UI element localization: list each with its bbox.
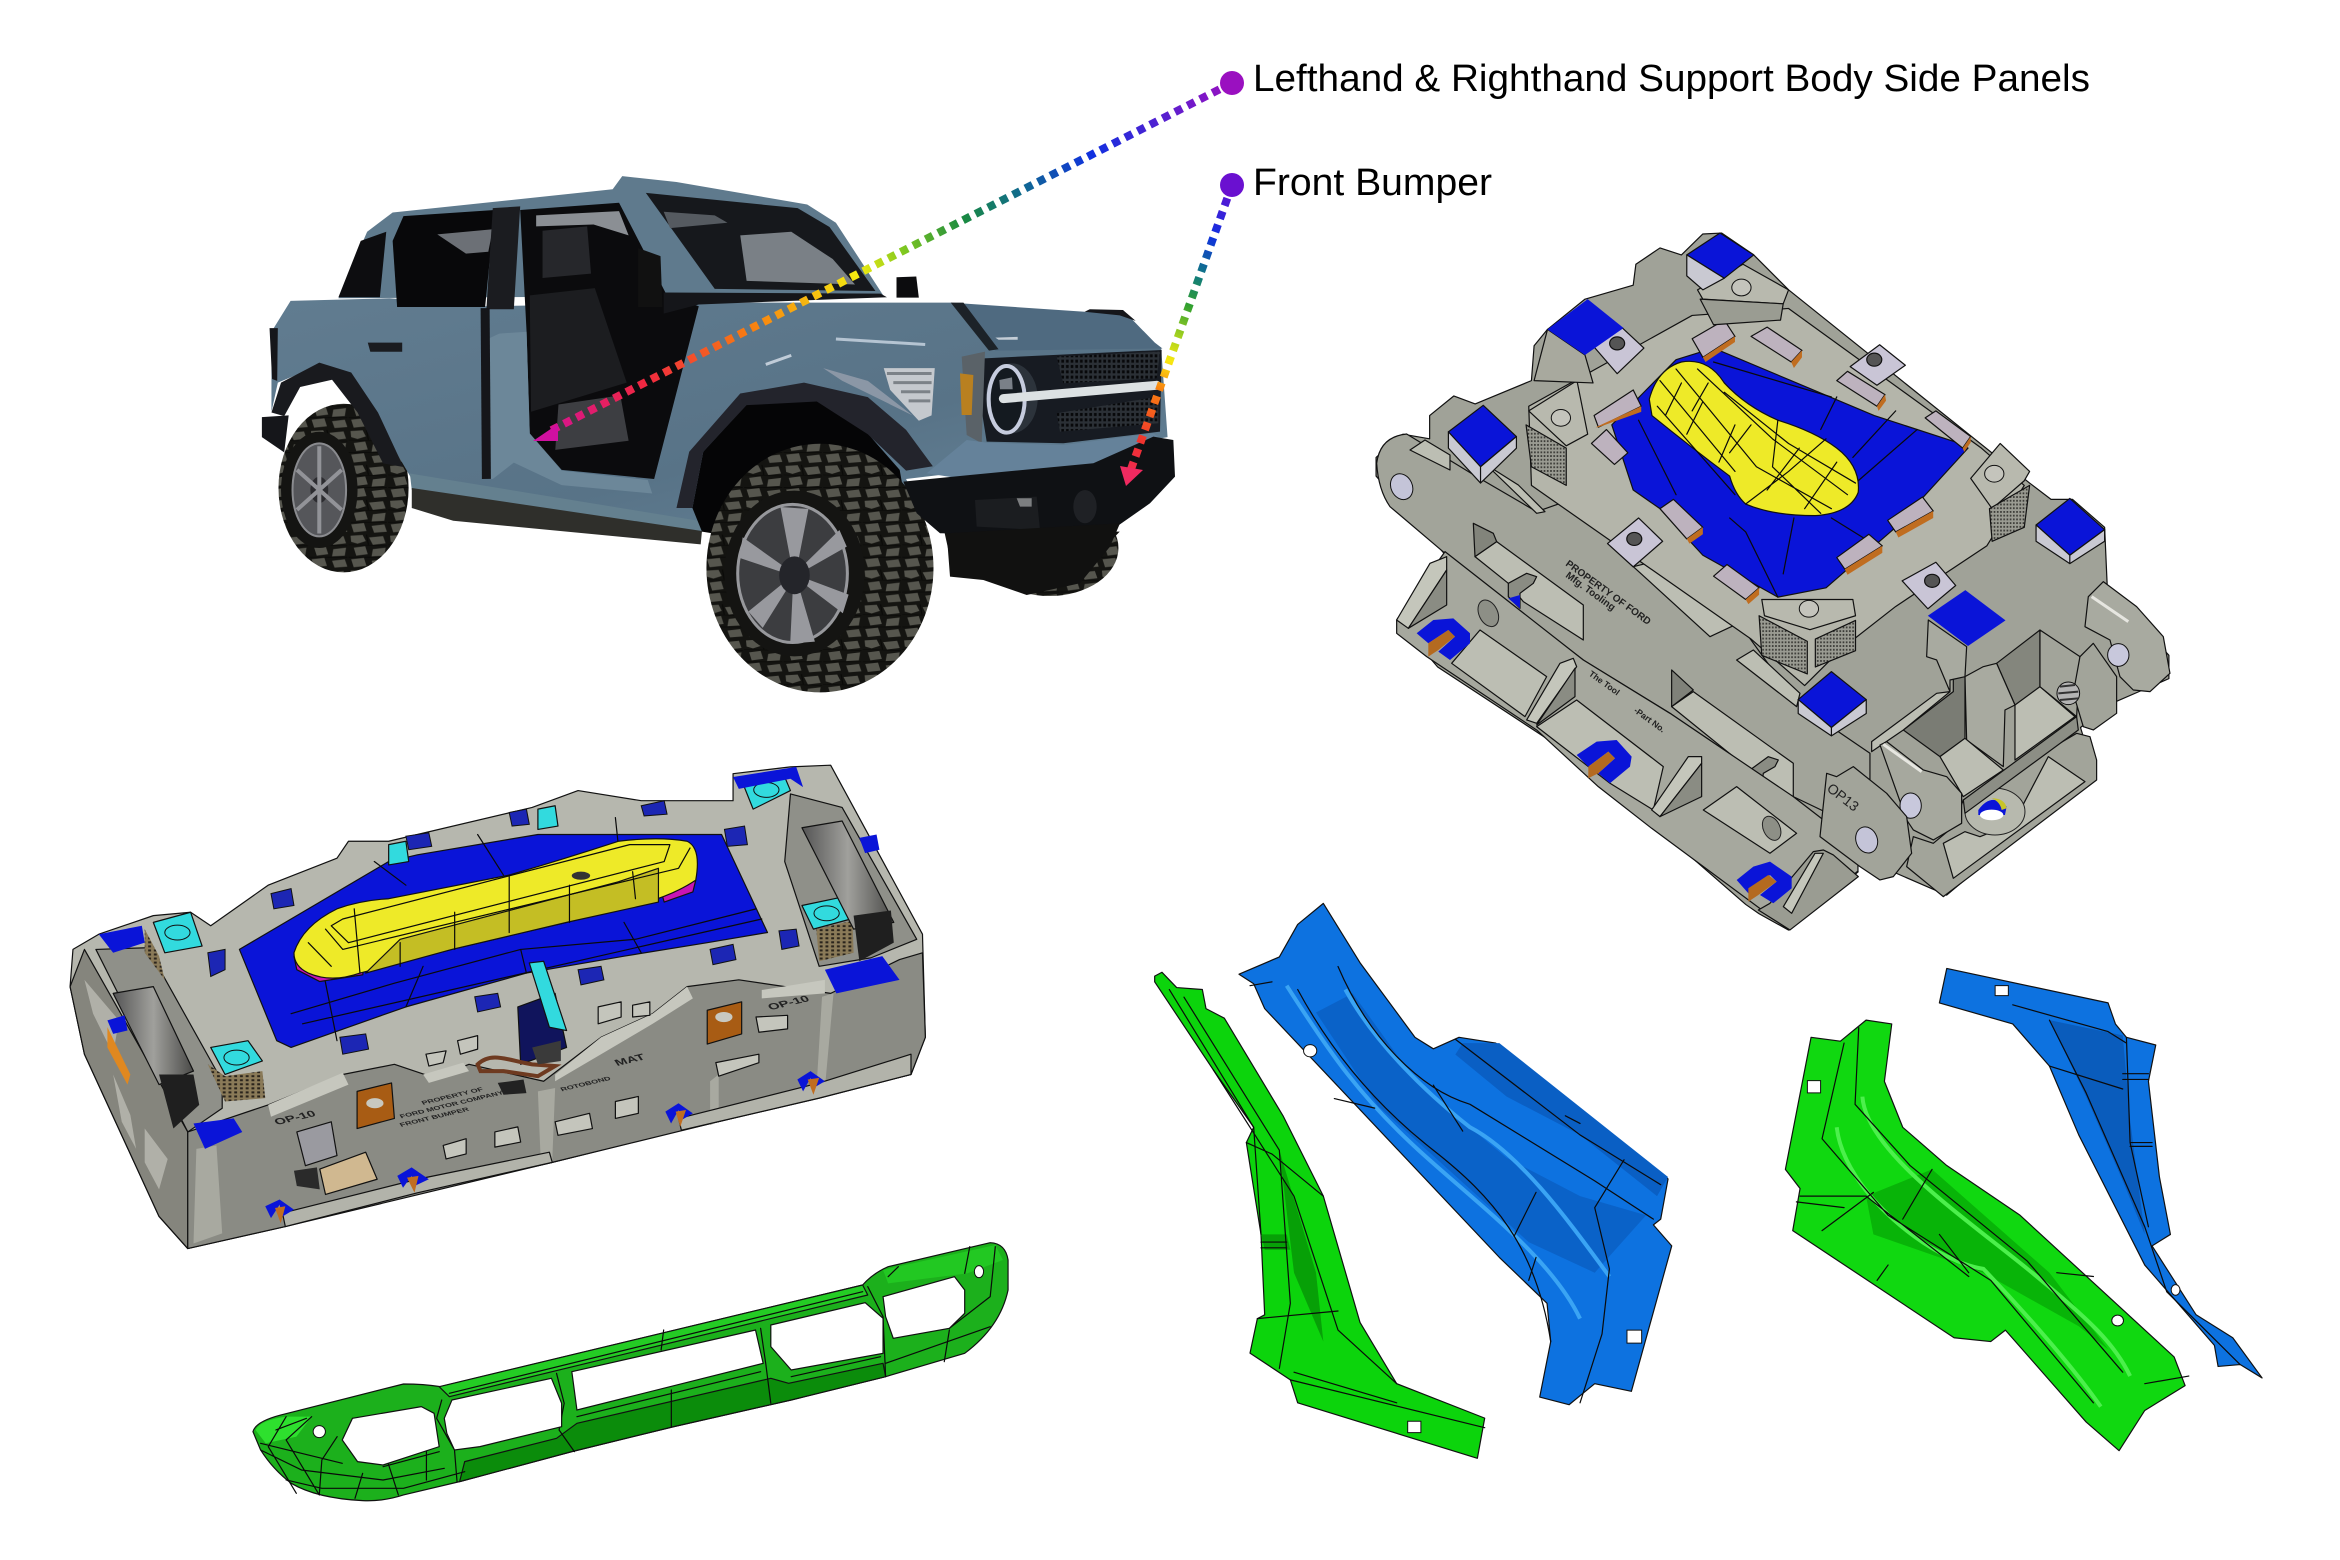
- central bar strip: [1963, 717, 2078, 813]
- engraved text: ROTOBOND: [559, 1075, 613, 1093]
- rear wheel: [278, 404, 409, 572]
- left end highlight: [256, 1417, 312, 1443]
- car body: [271, 298, 1168, 532]
- valve and switch box: [294, 1122, 377, 1194]
- cyan locating blocks: [153, 770, 851, 1074]
- left recess: [96, 948, 222, 1132]
- grille upper: [1057, 352, 1160, 383]
- blue corner cubes: [1448, 233, 2105, 736]
- edge slots: [265, 1071, 825, 1223]
- headlight surround: [962, 352, 985, 443]
- surface mesh lines: [261, 1247, 995, 1498]
- engraved text: The Tool: [1587, 669, 1622, 697]
- rocker sill: [410, 474, 702, 532]
- orange name plates: [107, 1002, 742, 1129]
- base ribs: [1397, 557, 1702, 817]
- panel shape: [1239, 903, 1672, 1405]
- rear tail light and bumper: [262, 328, 289, 452]
- die model: front bumper tool: [70, 765, 925, 1249]
- block circles: [165, 782, 839, 1065]
- yellow punch: [1649, 361, 1858, 516]
- left end face: [70, 949, 188, 1249]
- U slot three: [1737, 862, 1792, 903]
- rear door cut line: [485, 308, 486, 479]
- part: front bumper: [253, 1243, 1008, 1501]
- U slot one: [1417, 618, 1470, 660]
- engraved text: OP-10: [765, 993, 812, 1012]
- shaded upper band: [1455, 1043, 1668, 1196]
- clamp bolts: [1551, 279, 2004, 617]
- rear wheel arch: [271, 363, 403, 467]
- base floors: [1452, 630, 1797, 853]
- panel shape: [1155, 972, 1485, 1458]
- amber marker: [960, 373, 973, 415]
- callout leader: body side panels: [533, 83, 1232, 441]
- panel lines: [1796, 1028, 2189, 1403]
- floor: [1940, 738, 2003, 797]
- light strip: [1872, 692, 1950, 752]
- U slot two: [1577, 740, 1632, 783]
- base body: [1397, 552, 1858, 930]
- small blue stop blocks: [208, 801, 799, 1054]
- bumper outer shape: [253, 1243, 1008, 1501]
- part: green lefthand panel, side view: [1155, 972, 1485, 1458]
- front fascia: [980, 350, 1162, 443]
- small hole in bar: [1759, 813, 1785, 843]
- blue form pad: [239, 818, 768, 1047]
- lower darker face: [460, 1363, 886, 1482]
- right lug upper: [2057, 582, 2170, 730]
- die model: body side panel tool: [1376, 233, 2170, 930]
- dash cowl: [664, 292, 887, 314]
- callout leader: front bumper: [1120, 185, 1232, 486]
- bumper openings: [342, 1277, 965, 1465]
- gas cylinders: [113, 821, 894, 1129]
- far front wheel: [944, 500, 1120, 596]
- part: blue lefthand panel: [1239, 903, 1672, 1405]
- dark fold: [2049, 1020, 2145, 1234]
- lower right frame: [1907, 733, 2097, 897]
- engraved text: PROPERTY OF FORD: [1563, 559, 1653, 628]
- top plate: [1529, 308, 2024, 686]
- light strips: [1410, 440, 1800, 707]
- ridge highlights: [1287, 986, 1609, 1319]
- window two: [1672, 692, 1793, 800]
- block under blue cube: [1927, 620, 1967, 692]
- car photo: Ford Bronco: [262, 176, 1175, 692]
- right recess: [785, 794, 917, 966]
- robot switch assembly: [478, 961, 567, 1095]
- stop blocks with bolts: [1593, 328, 1956, 609]
- recess two: [1672, 670, 1693, 707]
- arrowhead: body side panels: [533, 424, 558, 441]
- recess: [1903, 677, 1965, 757]
- die silhouette: [1376, 233, 2169, 930]
- left front base and bar: [1377, 434, 1870, 930]
- side step: [412, 488, 702, 544]
- shaded band: [1866, 1169, 2108, 1349]
- panel lines: [1169, 990, 1485, 1428]
- panel holes: [1807, 1081, 2123, 1326]
- engraved text: [272, 993, 812, 1128]
- magenta punch base: [294, 880, 696, 982]
- front wheel arch: [676, 383, 933, 568]
- blue corner plates: [99, 767, 900, 1149]
- interior door jamb: [484, 332, 652, 494]
- right lug front: [1880, 742, 1962, 840]
- slot one: [1508, 573, 1537, 608]
- ridge highlights: [1837, 1097, 2130, 1407]
- box walls: [1965, 630, 2080, 767]
- mesh pads: [145, 921, 854, 1102]
- arrowhead: front bumper: [1120, 466, 1143, 486]
- hole in base: [1474, 597, 1503, 630]
- yellow bumper punch: [294, 839, 697, 978]
- op13 bar end: OP13: [1824, 780, 1862, 814]
- hood: [951, 303, 1162, 351]
- engraved text: FRONT BUMPER: [398, 1106, 471, 1128]
- blue pad: [1612, 348, 1968, 597]
- dark ridges: [1261, 1150, 1323, 1342]
- part: green righthand panel: [1785, 1020, 2189, 1451]
- label: front bumper: Front Bumper: [1253, 162, 1492, 204]
- rear door window: [393, 210, 495, 307]
- mirrors: [638, 248, 919, 307]
- light bar: [1003, 385, 1157, 399]
- engraved text: [1563, 559, 1667, 734]
- grille lower: [1057, 397, 1158, 432]
- callout dot: front bumper: [1220, 173, 1244, 197]
- slot two: [1750, 757, 1778, 791]
- pad orange edges: [1596, 336, 1971, 604]
- bumper: [903, 437, 1175, 535]
- panel holes: [1995, 986, 2180, 1295]
- panel lines: [1250, 967, 1661, 1403]
- right end highlight: [883, 1245, 1003, 1283]
- roof and pillars: [338, 176, 884, 298]
- front door opening with seats: [520, 203, 699, 479]
- upper bright rail: [439, 1285, 868, 1397]
- engraved text: OP-10: [272, 1108, 318, 1127]
- front face: [188, 953, 925, 1249]
- shaded central band: [1316, 993, 1646, 1273]
- right rear base and lugs: [1737, 582, 2170, 930]
- recess one: [1473, 523, 1497, 557]
- large blue blocks: [1534, 299, 2006, 646]
- engraved text: FORD MOTOR COMPANY: [398, 1089, 505, 1120]
- mounting holes: [313, 1266, 984, 1438]
- label: body side panels: Lefthand & Righthand Support Body Side Panels: [1253, 58, 2090, 100]
- lug pin: [1386, 470, 1417, 503]
- nose close-up: [903, 350, 1175, 595]
- panel shape: [1939, 968, 2262, 1378]
- bar face: [1377, 434, 1870, 833]
- top of die: [1448, 233, 2105, 736]
- body band below grille: [927, 433, 1160, 480]
- lower rib: [1758, 850, 1858, 930]
- op13 bar end: [1820, 767, 1912, 880]
- engraved text: -Part No.: [1632, 705, 1667, 734]
- underbody: [947, 523, 1120, 595]
- pad blocks: [1591, 320, 1971, 599]
- die silhouette: [70, 765, 925, 1249]
- front wheel: [706, 444, 933, 692]
- callout dot: body side panels: [1220, 71, 1244, 95]
- panel shape: [1785, 1020, 2185, 1451]
- engraved text: PROPERTY OF: [420, 1086, 485, 1106]
- door handle: [368, 343, 402, 352]
- rear quarter window: [338, 232, 386, 297]
- panel holes: [1304, 1045, 1642, 1343]
- panel lines: [2013, 1005, 2240, 1365]
- part: blue righthand panel, side view: [1939, 968, 2262, 1378]
- panel hole: [1408, 1421, 1421, 1433]
- door pillar: [486, 206, 520, 309]
- window one: [1475, 542, 1583, 640]
- triangular clamp blocks: [1526, 264, 2030, 674]
- fender highlights and vent: [766, 339, 935, 421]
- engraved text: Mfg. Tooling: [1563, 570, 1617, 614]
- engraved text: MAT: [612, 1052, 648, 1068]
- headlight: [986, 363, 1038, 433]
- windshield: [646, 193, 875, 291]
